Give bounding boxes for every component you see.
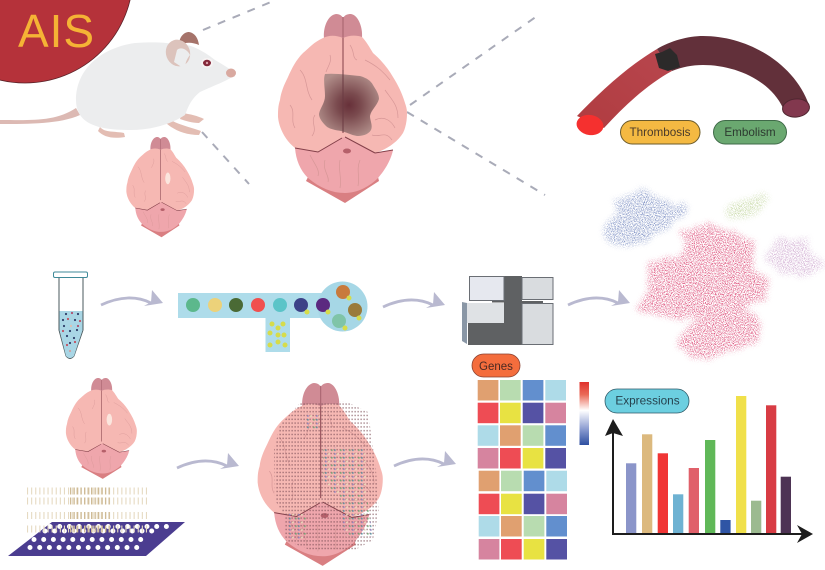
tissue brain (66, 378, 137, 479)
UMAP scatter plot (600, 188, 820, 360)
small brain (126, 137, 194, 237)
vessel left opening (575, 113, 605, 137)
pill: Embolism: Embolism (724, 126, 776, 139)
icon: sample tube (54, 272, 88, 358)
large brain with infarct (278, 14, 407, 203)
chart axes (605, 419, 813, 543)
icon: mouse (0, 32, 236, 138)
arrow: spatial map to heatmap (394, 451, 456, 467)
pill: Embolism (714, 120, 786, 144)
microfluidic chip (178, 282, 368, 352)
arrow: chip to sequencer (383, 292, 445, 308)
heatmap colour scale (580, 382, 589, 445)
gene heatmap (478, 380, 567, 560)
yellow reagent beads (268, 296, 362, 348)
capture probes (27, 491, 150, 529)
pill: Expressions (605, 389, 689, 413)
arrow: slide to spatial map (177, 453, 239, 469)
slide plate (8, 522, 185, 556)
pill: Genes: Genes (479, 361, 513, 373)
icon: sequencer (462, 276, 553, 345)
AIS badge (0, 0, 133, 83)
pill: Genes (472, 354, 520, 377)
vessel right opening (782, 98, 810, 118)
arrow: sequencer to scatter (568, 290, 630, 306)
coloured spots (287, 413, 373, 540)
blood vessel (575, 36, 810, 137)
AIS badge: AIS (18, 5, 94, 57)
clot (655, 48, 680, 71)
cell beads (186, 285, 362, 328)
pill: Thrombosis (620, 120, 700, 144)
arrow: tube to chip (101, 290, 163, 306)
spot overlay (274, 401, 379, 550)
bar chart (605, 396, 813, 543)
spatial transcriptomics brain (258, 383, 383, 566)
spatial barcode slide (8, 491, 185, 556)
infarct lesion (319, 74, 379, 136)
dashed zoom lines (202, 2, 545, 195)
pill: Expressions: Expressions (615, 394, 680, 408)
pill: Thrombosis: Thrombosis (629, 126, 691, 139)
